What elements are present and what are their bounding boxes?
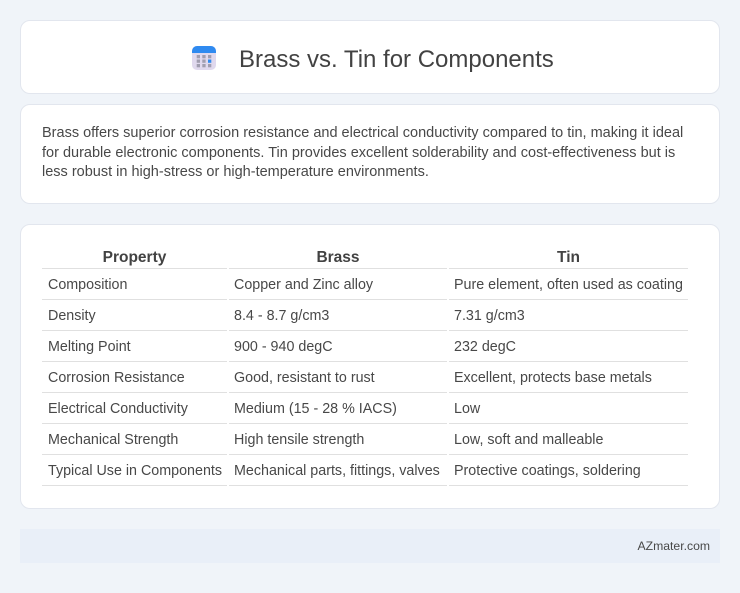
- footer bar: [20, 529, 720, 563]
- panel: comparison table: [20, 224, 720, 509]
- table rows: 232 degC: [454, 339, 516, 355]
- table rows: 8.4 - 8.7 g/cm3: [234, 308, 329, 324]
- table rows: Protective coatings, soldering: [454, 463, 641, 479]
- table rows: 900 - 940 degC: [234, 339, 333, 355]
- table rows: Composition: [48, 277, 127, 293]
- text block: summary: Brass offers superior corrosion resistance and electrical conductivity compared to tin, making it ideal: [42, 125, 683, 141]
- table header: Tin: [557, 249, 580, 266]
- table rows: Melting Point: [48, 339, 131, 355]
- table rows: Copper and Zinc alloy: [234, 277, 373, 293]
- table rows: Electrical Conductivity: [48, 401, 188, 417]
- table rows: Pure element, often used as coating: [454, 277, 683, 293]
- table rows: Medium (15 - 28 % IACS): [234, 401, 397, 417]
- panel: summary: [20, 104, 720, 204]
- table rows: Mechanical Strength: [48, 432, 178, 448]
- table rows: 7.31 g/cm3: [454, 308, 525, 324]
- title: Brass vs. Tin for Components: [239, 46, 554, 72]
- table rows: Low: [454, 401, 480, 417]
- table header: Brass: [316, 249, 360, 266]
- table rows: Typical Use in Components: [48, 463, 222, 479]
- table rows: [42, 268, 688, 486]
- table rows: Mechanical parts, fittings, valves: [234, 463, 440, 479]
- table rows: Excellent, protects base metals: [454, 370, 652, 386]
- table rows: Density: [48, 308, 96, 324]
- text block: summary: less robust in high-stress or high-temperature environments.: [42, 164, 429, 180]
- text block: summary: [42, 125, 683, 180]
- table header: [103, 249, 580, 266]
- table rows: Good, resistant to rust: [234, 370, 375, 386]
- table rows: High tensile strength: [234, 432, 364, 448]
- footer brand text: AZmater.com: [638, 538, 710, 552]
- panel: header: [20, 20, 720, 94]
- table header: Property: [103, 249, 166, 266]
- icon: calendar: [192, 46, 216, 70]
- table rows: Low, soft and malleable: [454, 432, 603, 448]
- table rows: Corrosion Resistance: [48, 370, 185, 386]
- text block: summary: for durable electronic components. Tin provides excellent solderability and cost-effectiveness but is: [42, 144, 675, 160]
